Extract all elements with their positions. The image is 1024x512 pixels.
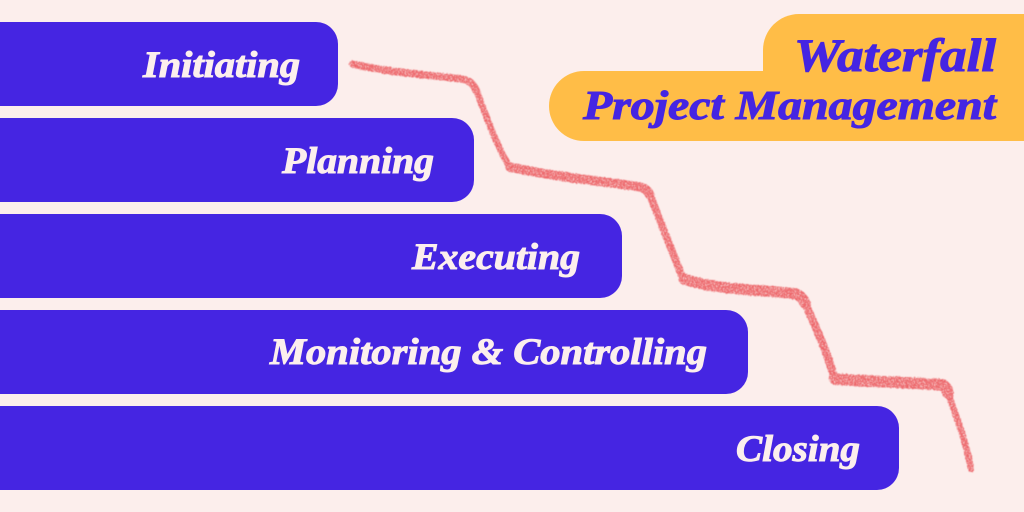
title text: Project Management: Project Management — [582, 82, 998, 128]
waterfall crayon line — [353, 64, 971, 469]
bar: Executing — [0, 214, 622, 298]
bar: Initiating — [0, 22, 338, 106]
bar: Closing — [0, 406, 899, 490]
bar: Closing: Closing — [736, 429, 860, 470]
bar: Monitoring & Controlling — [0, 310, 748, 394]
title badge — [549, 14, 1024, 141]
bar: Executing: Executing — [411, 237, 580, 278]
bar: Monitoring & Controlling: Monitoring & Controlling — [269, 332, 707, 373]
title text: Waterfall: Waterfall — [794, 30, 996, 82]
bar: Planning — [0, 118, 474, 202]
bar: Planning: Planning — [281, 141, 434, 182]
bar: Initiating: Initiating — [142, 45, 300, 86]
